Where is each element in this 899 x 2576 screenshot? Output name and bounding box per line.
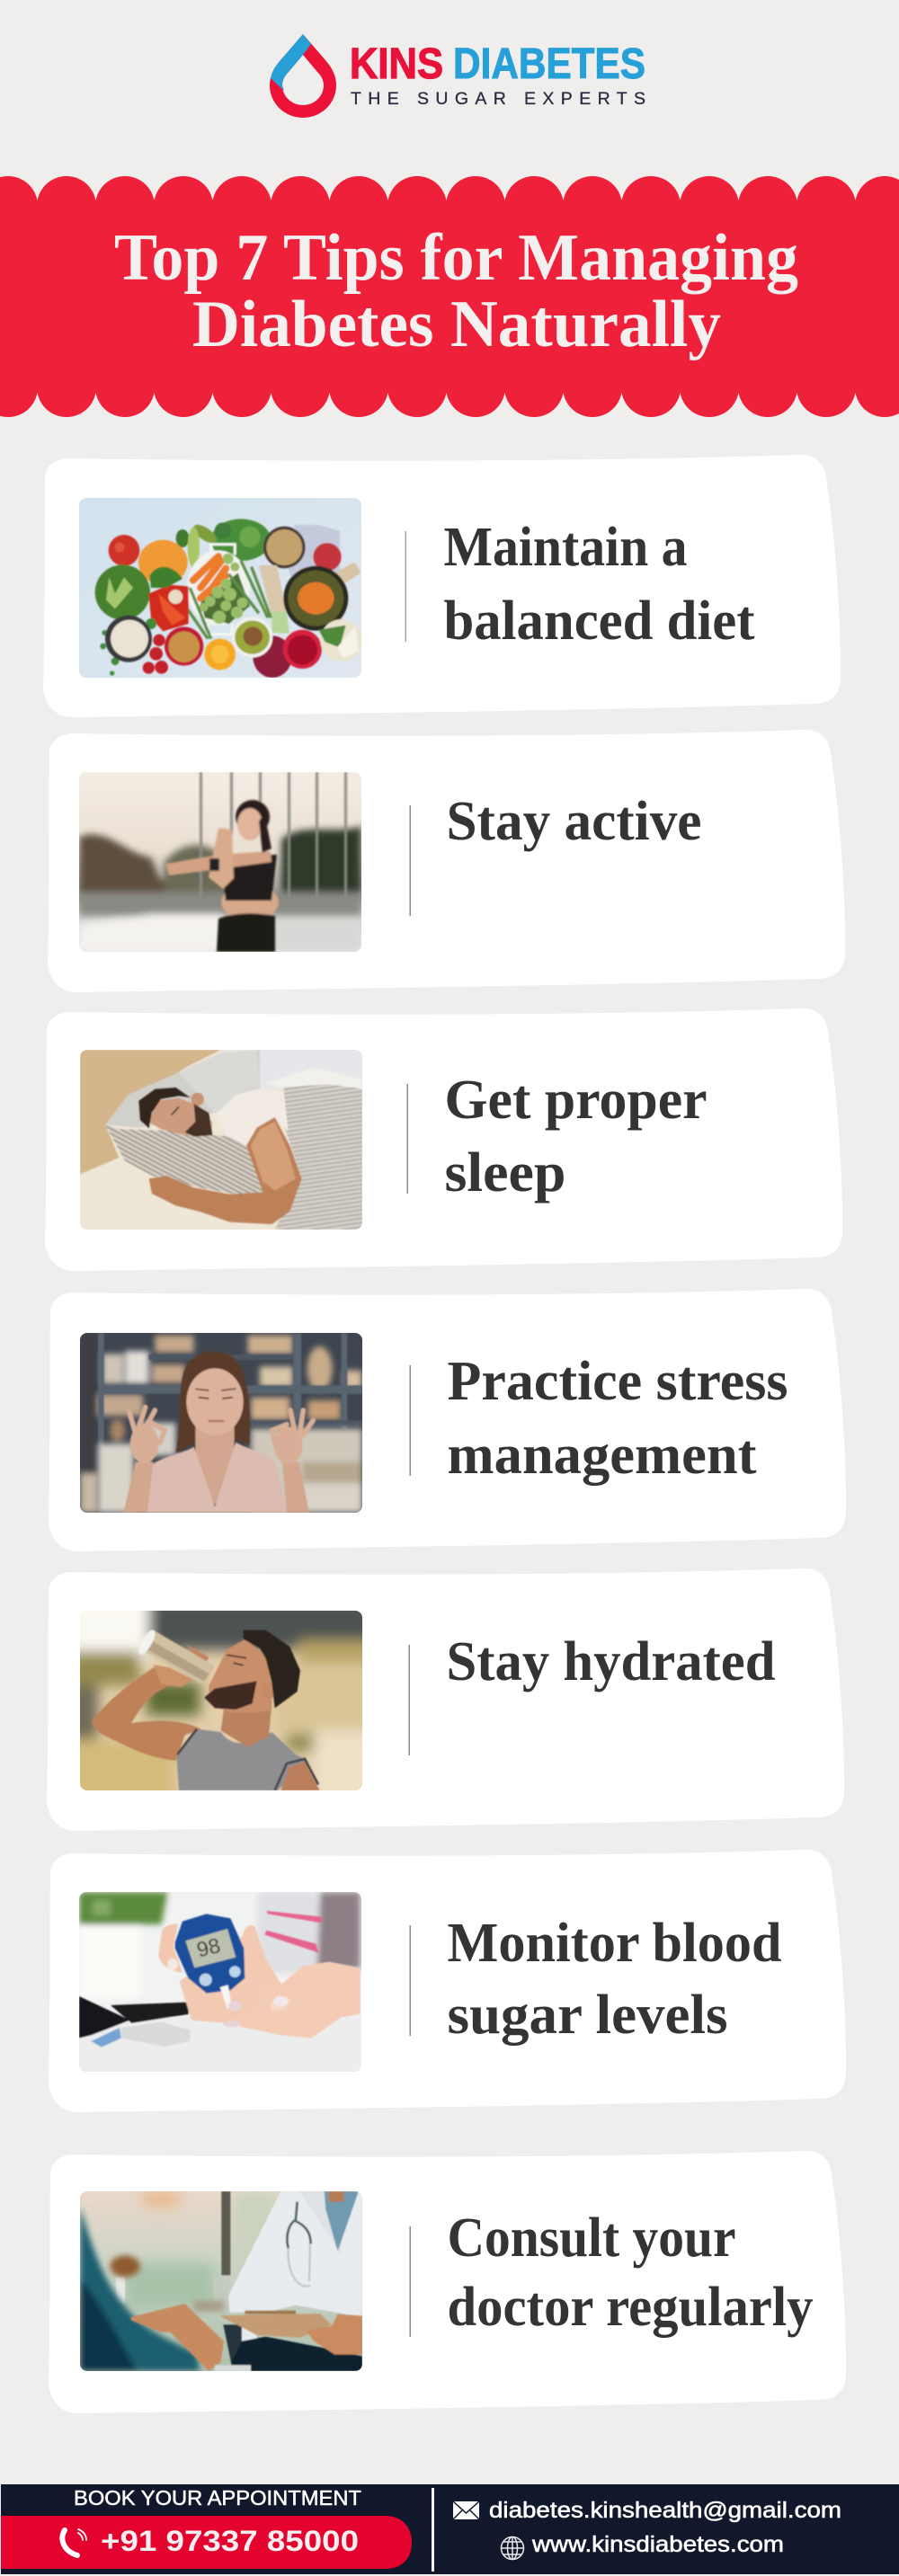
panel: tip 3 proper sleep bbox=[45, 1008, 842, 1271]
title text: Diabetes Naturally bbox=[192, 288, 721, 361]
card background bbox=[49, 2151, 846, 2413]
card background bbox=[49, 1850, 846, 2112]
photo: glucose meter: 98 bbox=[194, 1933, 223, 1962]
panel: tip 4 stress management bbox=[49, 1289, 846, 1551]
tip label: Practice stress bbox=[448, 1351, 788, 1412]
card background bbox=[48, 730, 845, 992]
tip label bbox=[444, 1070, 707, 1204]
tip label: sleep bbox=[444, 1142, 566, 1204]
tip label bbox=[448, 1351, 788, 1486]
photo: man drinking water bbox=[80, 1611, 362, 1790]
icon: blood drop bbox=[270, 34, 336, 118]
divider bbox=[410, 1925, 411, 2036]
divider bbox=[406, 1084, 408, 1194]
divider bbox=[410, 805, 411, 916]
panel: tip 7 consult doctor bbox=[49, 2151, 846, 2413]
tip label: doctor regularly bbox=[448, 2277, 813, 2338]
appointment heading: BOOK YOUR APPOINTMENT bbox=[74, 2486, 361, 2509]
phone number: +91 97337 85000 bbox=[101, 2525, 359, 2557]
panel: tip 5 stay hydrated bbox=[47, 1568, 844, 1831]
logo tagline: THE SUGAR EXPERTS bbox=[351, 89, 645, 109]
tip label: Stay active bbox=[446, 791, 701, 852]
photo: doctor consultation bbox=[80, 2190, 362, 2373]
photo: woman meditating bbox=[80, 1333, 362, 1513]
photo: man sleeping bbox=[80, 1050, 362, 1230]
footer bar bbox=[1, 2484, 899, 2574]
tip label: Consult your bbox=[448, 2207, 735, 2269]
tip label bbox=[448, 2207, 813, 2338]
icon: phone bbox=[62, 2529, 86, 2555]
tip label: Maintain a bbox=[444, 517, 687, 578]
website address: www.kinsdiabetes.com bbox=[531, 2532, 784, 2557]
logo word: KINS: KINS bbox=[350, 40, 443, 88]
contact: website bbox=[502, 2532, 784, 2560]
divider bbox=[410, 2226, 411, 2337]
tip label: Monitor blood bbox=[448, 1913, 782, 1974]
title text: Top 7 Tips for Managing bbox=[114, 221, 798, 295]
photo: healthy food bbox=[79, 498, 362, 678]
tip label: balanced diet bbox=[444, 591, 755, 652]
photo: glucose meter bbox=[79, 1892, 361, 2072]
email address: diabetes.kinshealth@gmail.com bbox=[489, 2498, 841, 2523]
banner scalloped shape bbox=[0, 176, 899, 417]
tip label bbox=[448, 1913, 782, 2046]
contact: email bbox=[453, 2498, 841, 2523]
tip label: Stay hydrated bbox=[446, 1631, 775, 1692]
panel: tip 1 balanced diet bbox=[43, 455, 841, 717]
tip label: Get proper bbox=[444, 1070, 707, 1131]
photo: woman stretching bbox=[79, 772, 361, 952]
footer background bbox=[1, 2484, 899, 2574]
icon: envelope bbox=[453, 2501, 479, 2519]
vertical separator bbox=[432, 2488, 434, 2572]
card background bbox=[45, 1008, 842, 1271]
card background bbox=[43, 455, 841, 717]
tip label bbox=[444, 517, 755, 652]
phone pill bbox=[1, 2516, 412, 2569]
divider bbox=[410, 1365, 411, 1476]
panel: tip 6 monitor blood sugar bbox=[49, 1850, 846, 2112]
logo: Kins Diabetes bbox=[270, 34, 645, 118]
tip label: management bbox=[448, 1425, 757, 1486]
title banner bbox=[0, 176, 899, 417]
divider bbox=[408, 1645, 410, 1755]
panel: tip 2 stay active bbox=[48, 730, 845, 992]
title text bbox=[114, 221, 798, 361]
divider bbox=[405, 531, 406, 642]
logo word: DIABETES: DIABETES bbox=[453, 40, 645, 88]
card background bbox=[47, 1568, 844, 1831]
tip label: sugar levels bbox=[448, 1985, 728, 2046]
card background bbox=[49, 1289, 846, 1551]
icon: globe bbox=[502, 2536, 523, 2560]
